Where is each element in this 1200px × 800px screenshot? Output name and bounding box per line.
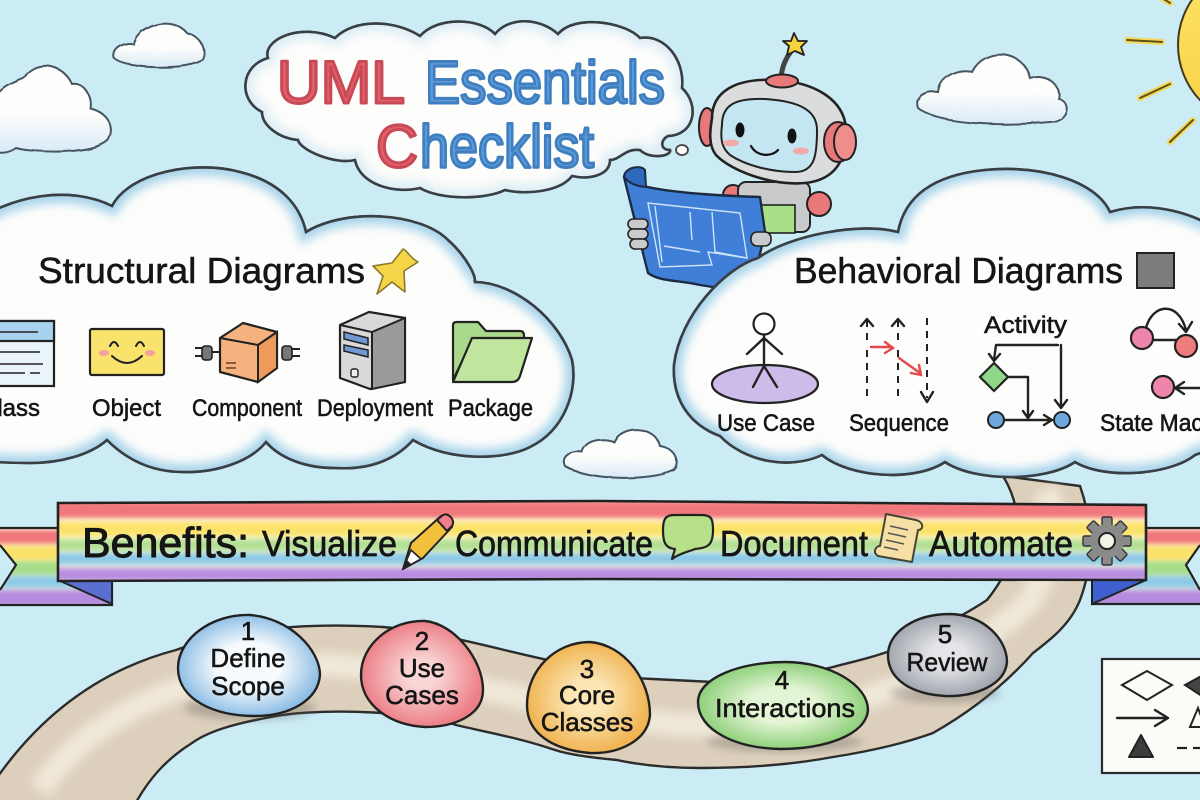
step 4: interactions <box>698 662 868 752</box>
robot body <box>723 182 831 233</box>
step 1: define scope <box>178 615 320 720</box>
label: sequence: Sequence <box>849 410 949 437</box>
label: use case: Use Case <box>717 410 815 437</box>
robot left ear <box>699 108 715 146</box>
icon: grey square <box>1137 253 1174 288</box>
step 2: use cases: 2 <box>415 626 429 656</box>
small cloud middle <box>564 430 677 478</box>
step 2: use cases: Cases <box>385 680 459 710</box>
step 1: define scope: Define <box>210 643 286 673</box>
step 1: define scope: 1 <box>241 616 255 646</box>
benefit: visualize: Visualize <box>262 523 397 564</box>
label: component: Component <box>192 395 302 422</box>
title text: Essentials <box>425 49 665 116</box>
ribbon left tail <box>0 528 120 606</box>
benefit: communicate: Communicate <box>455 523 653 564</box>
icon: deployment server <box>340 312 405 389</box>
ribbon main band <box>50 501 1155 581</box>
step 4: interactions: 4 <box>775 665 789 695</box>
small cloud left <box>0 66 111 153</box>
left hand <box>628 219 648 249</box>
step 4: interactions: Interactions <box>715 693 855 723</box>
icon: class <box>0 321 54 386</box>
title text <box>277 49 665 180</box>
step 5: review <box>888 614 1007 703</box>
robot screen <box>721 99 817 172</box>
step 3: core classes: Core <box>559 680 615 710</box>
title thought cloud <box>245 21 693 197</box>
label: activity: Activity <box>984 312 1067 339</box>
ribbon right tail <box>1080 528 1200 606</box>
step 3: core classes: 3 <box>580 654 594 684</box>
small cloud right <box>917 55 1067 124</box>
icon: state machine <box>1131 309 1200 398</box>
title text: C <box>376 113 418 180</box>
icon: star <box>373 249 418 294</box>
step 2: use cases: Use <box>399 653 445 683</box>
step 1: define scope: Scope <box>211 671 285 701</box>
icon: sequence diagram <box>861 318 933 402</box>
antenna base <box>766 74 798 88</box>
icon: component <box>195 323 300 382</box>
label: object: Object <box>92 395 161 422</box>
heading: behavioral diagrams: Behavioral Diagrams <box>794 250 1123 291</box>
icon: activity diagram <box>980 345 1070 428</box>
heading: structural diagrams: Structural Diagrams <box>38 250 365 291</box>
legend: notation symbols <box>1102 659 1200 773</box>
robot mascot with blueprint <box>624 33 856 293</box>
step 3: core classes <box>527 642 650 753</box>
panel: behavioral diagrams cloud <box>674 169 1200 477</box>
small cloud top centre <box>114 24 204 67</box>
icon: pencil <box>403 514 453 569</box>
robot right ear <box>824 122 856 162</box>
label: deployment: Deployment <box>317 395 433 422</box>
robot head <box>710 80 846 183</box>
step 3: core classes: Classes <box>541 707 633 737</box>
thought bubble dot <box>676 145 688 155</box>
robot face <box>723 122 809 155</box>
icon: use case actor <box>712 314 818 403</box>
title text: hecklist <box>420 113 594 180</box>
benefits heading: Benefits: <box>82 519 249 566</box>
sun <box>1127 0 1200 142</box>
icon: object <box>90 329 164 375</box>
antenna star <box>783 33 807 55</box>
step 2: use cases <box>361 621 483 727</box>
panel: structural diagrams cloud <box>0 167 573 472</box>
label: package: Package <box>448 395 533 422</box>
icon: gear <box>1083 517 1131 565</box>
step 5: review: Review <box>906 647 988 677</box>
title text: UML <box>277 49 405 116</box>
winding road path <box>0 476 1090 800</box>
benefit: automate: Automate <box>929 523 1073 564</box>
step 5: review: 5 <box>938 619 952 649</box>
right hand <box>751 232 771 246</box>
icon: scroll <box>875 514 922 562</box>
benefit: document: Document <box>720 523 868 564</box>
benefits ribbon banner <box>0 501 1200 606</box>
icon: package folder <box>453 322 532 382</box>
icon: speech bubble <box>663 515 713 559</box>
blueprint <box>624 167 765 293</box>
robot antenna <box>781 50 792 78</box>
